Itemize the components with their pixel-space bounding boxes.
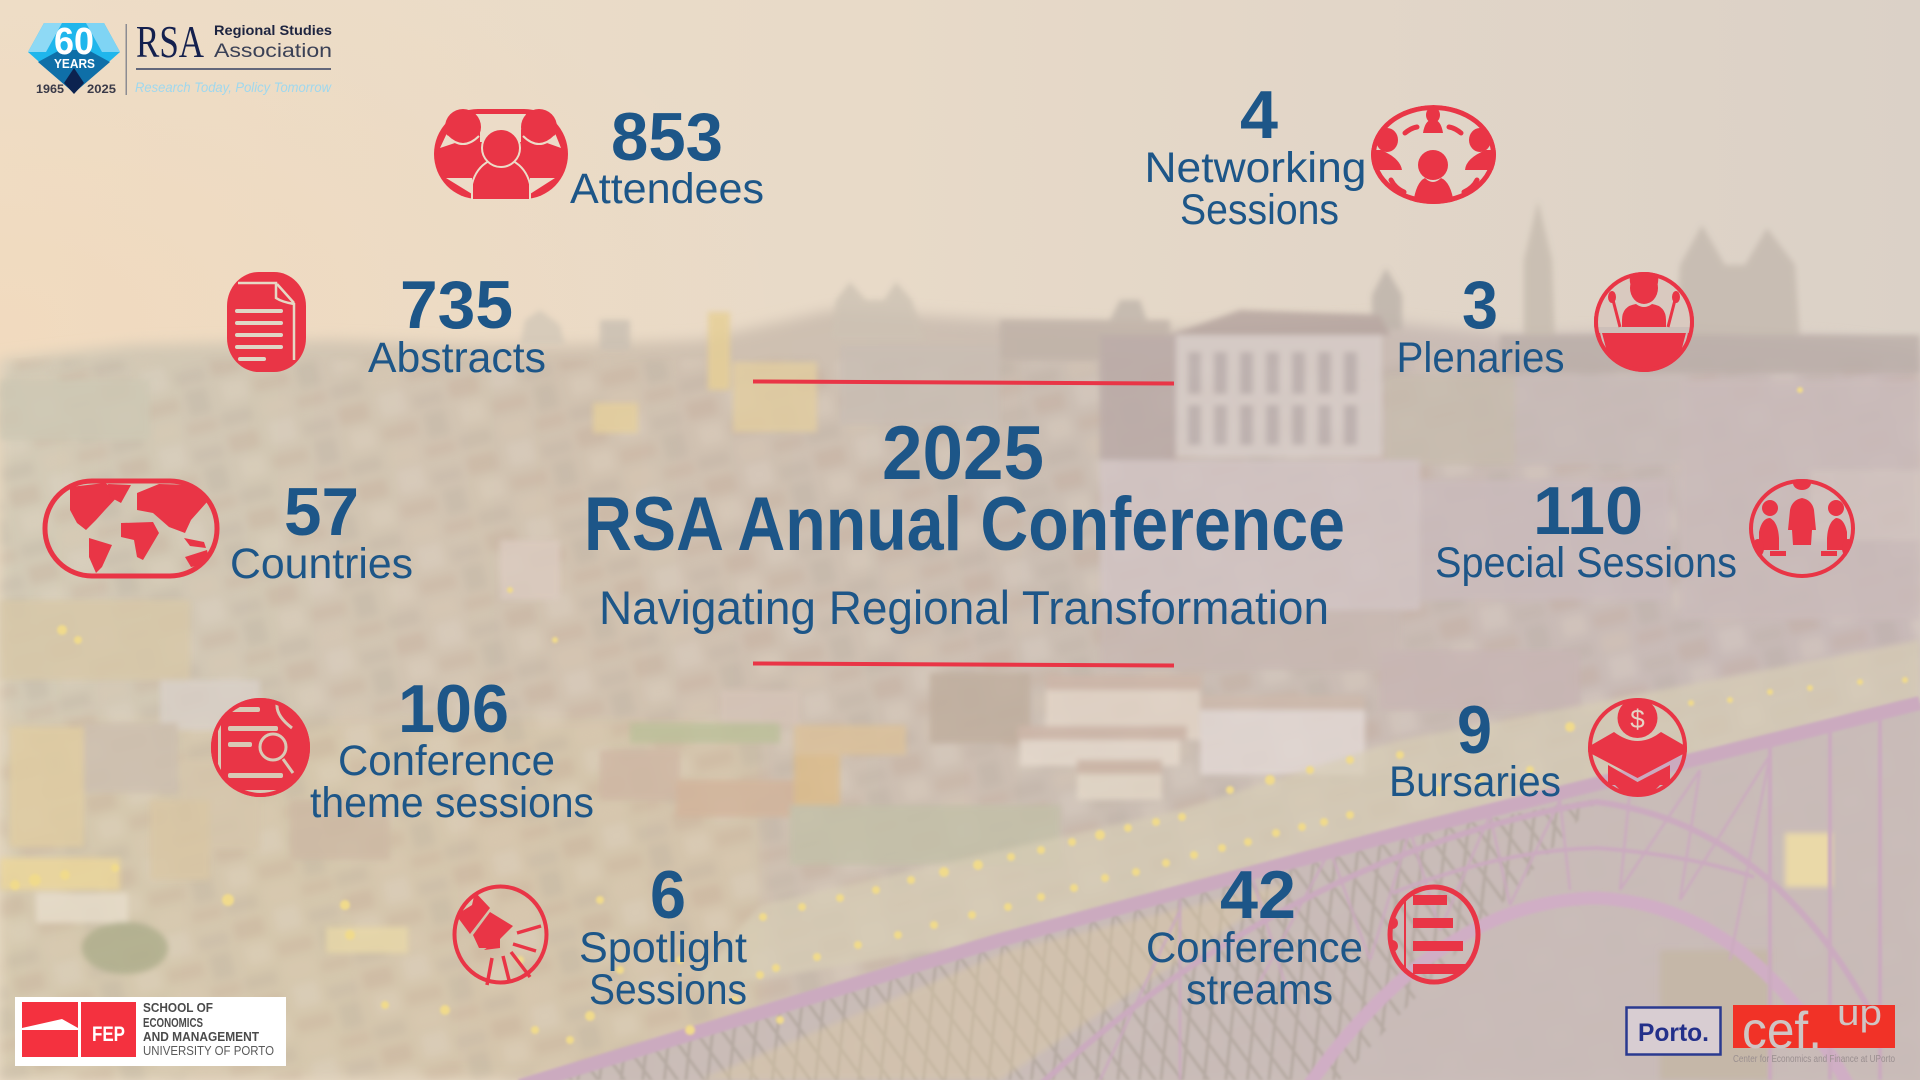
diamond emblem — [28, 21, 120, 94]
stat: 9 Bursaries — [1392, 698, 1687, 797]
stat: 106 Conference theme sessions: Conference — [338, 737, 555, 785]
stat: 853 Attendees — [434, 99, 764, 213]
stat: 42 Conference streams: Conference — [1146, 924, 1363, 972]
stat: 110 Special Sessions: 110 — [1533, 473, 1643, 549]
stat: 9 Bursaries: 9 — [1457, 692, 1492, 768]
lower left buildings — [10, 727, 84, 847]
stat: 57 Countries: 57 — [284, 474, 359, 550]
stat: 735 Abstracts: 735 — [400, 267, 513, 343]
logo: RSA 60 years: RSA — [136, 16, 204, 67]
logo: cef.up — [1733, 992, 1895, 1065]
stat: 42 Conference streams — [1148, 870, 1480, 1004]
icon: list of streams — [1386, 887, 1478, 982]
stat: 3 Plenaries: Plenaries — [1396, 334, 1564, 382]
stat: 4 Networking Sessions: 4 — [1240, 77, 1278, 153]
icon: networking circle — [1371, 107, 1496, 204]
logo: RSA 60 years: Regional Studies — [214, 22, 332, 38]
logo: RSA 60 years: Association — [214, 41, 332, 62]
diamond emblem: YEARS — [54, 56, 95, 71]
centre title block: RSA Annual Conference — [584, 482, 1345, 567]
icon: spotlight — [454, 886, 546, 985]
stat: 853 Attendees: 853 — [611, 99, 723, 175]
stat: 6 Spotlight Sessions — [452, 870, 747, 1004]
logo: FEP University of Porto: ECONOMICS — [143, 1015, 203, 1030]
icon: scholarship cap with dollar coin: $ — [1630, 704, 1645, 734]
logo: FEP University of Porto: UNIVERSITY OF PORTO — [143, 1043, 274, 1058]
bridge — [520, 703, 1920, 1080]
stat: 106 Conference theme sessions: theme sessions — [310, 779, 594, 827]
palace — [1170, 310, 1390, 335]
icon: speaker at podium — [1594, 272, 1694, 372]
stat: 3 Plenaries — [1400, 272, 1694, 372]
stat: 42 Conference streams: 42 — [1220, 857, 1296, 933]
bridge truss — [540, 703, 1920, 1080]
icon: round-table meeting — [1751, 476, 1854, 576]
centre title block — [584, 380, 1345, 668]
icon: group of people — [434, 109, 568, 199]
stat: 106 Conference theme sessions — [211, 684, 592, 818]
logo: cef.up: up — [1837, 992, 1882, 1033]
stat: 4 Networking Sessions — [1148, 91, 1496, 224]
stat: 6 Spotlight Sessions: 6 — [650, 857, 686, 933]
stat: 110 Special Sessions — [1435, 473, 1854, 587]
stat: 735 Abstracts: Abstracts — [368, 334, 546, 382]
logo: RSA 60 years — [28, 16, 332, 96]
stat: 4 Networking Sessions: Networking — [1144, 144, 1366, 192]
stat: 6 Spotlight Sessions: Spotlight — [579, 924, 747, 972]
stat: 110 Special Sessions: Special Sessions — [1435, 539, 1737, 587]
left town blocks — [0, 380, 150, 440]
logo: RSA 60 years: 1965 — [36, 82, 64, 96]
riverside road — [690, 640, 1920, 990]
stat: 106 Conference theme sessions: 106 — [398, 671, 509, 747]
logo: cef.up: cef. — [1742, 1002, 1822, 1060]
logo: Porto: Porto. — [1638, 1019, 1709, 1047]
logo: FEP University of Porto: FEP — [92, 1023, 125, 1046]
stat: 42 Conference streams: streams — [1186, 966, 1333, 1014]
icon: world map — [45, 481, 217, 576]
centre title block: 2025 — [882, 411, 1044, 496]
logo: RSA 60 years: Research Today, Policy Tomorrow — [135, 79, 332, 95]
stat: 853 Attendees: Attendees — [570, 165, 764, 213]
logo: FEP University of Porto — [15, 997, 286, 1066]
icon: document with magnifier — [211, 698, 310, 797]
logo: FEP University of Porto: AND MANAGEMENT — [143, 1029, 259, 1044]
stat: 4 Networking Sessions: Sessions — [1180, 186, 1339, 234]
diamond emblem: 60 — [54, 21, 94, 63]
stat: 57 Countries: Countries — [230, 540, 413, 588]
stat: 6 Spotlight Sessions: Sessions — [589, 966, 747, 1014]
stat: 735 Abstracts — [227, 267, 546, 382]
mid town buildings — [600, 750, 680, 800]
logo: RSA 60 years: 2025 — [87, 82, 116, 96]
stat: 9 Bursaries: Bursaries — [1389, 758, 1561, 806]
icon: document — [227, 272, 306, 372]
logo: FEP University of Porto: SCHOOL OF — [143, 1000, 213, 1015]
street lights — [10, 387, 1908, 1044]
centre title block: Navigating Regional Transformation — [599, 581, 1329, 634]
skyline towers and domes — [1524, 201, 1555, 340]
stat: 3 Plenaries: 3 — [1462, 267, 1498, 343]
icon: scholarship cap with dollar coin — [1588, 698, 1687, 795]
logo: Porto — [1626, 1008, 1720, 1054]
stat: 57 Countries — [42, 478, 412, 578]
